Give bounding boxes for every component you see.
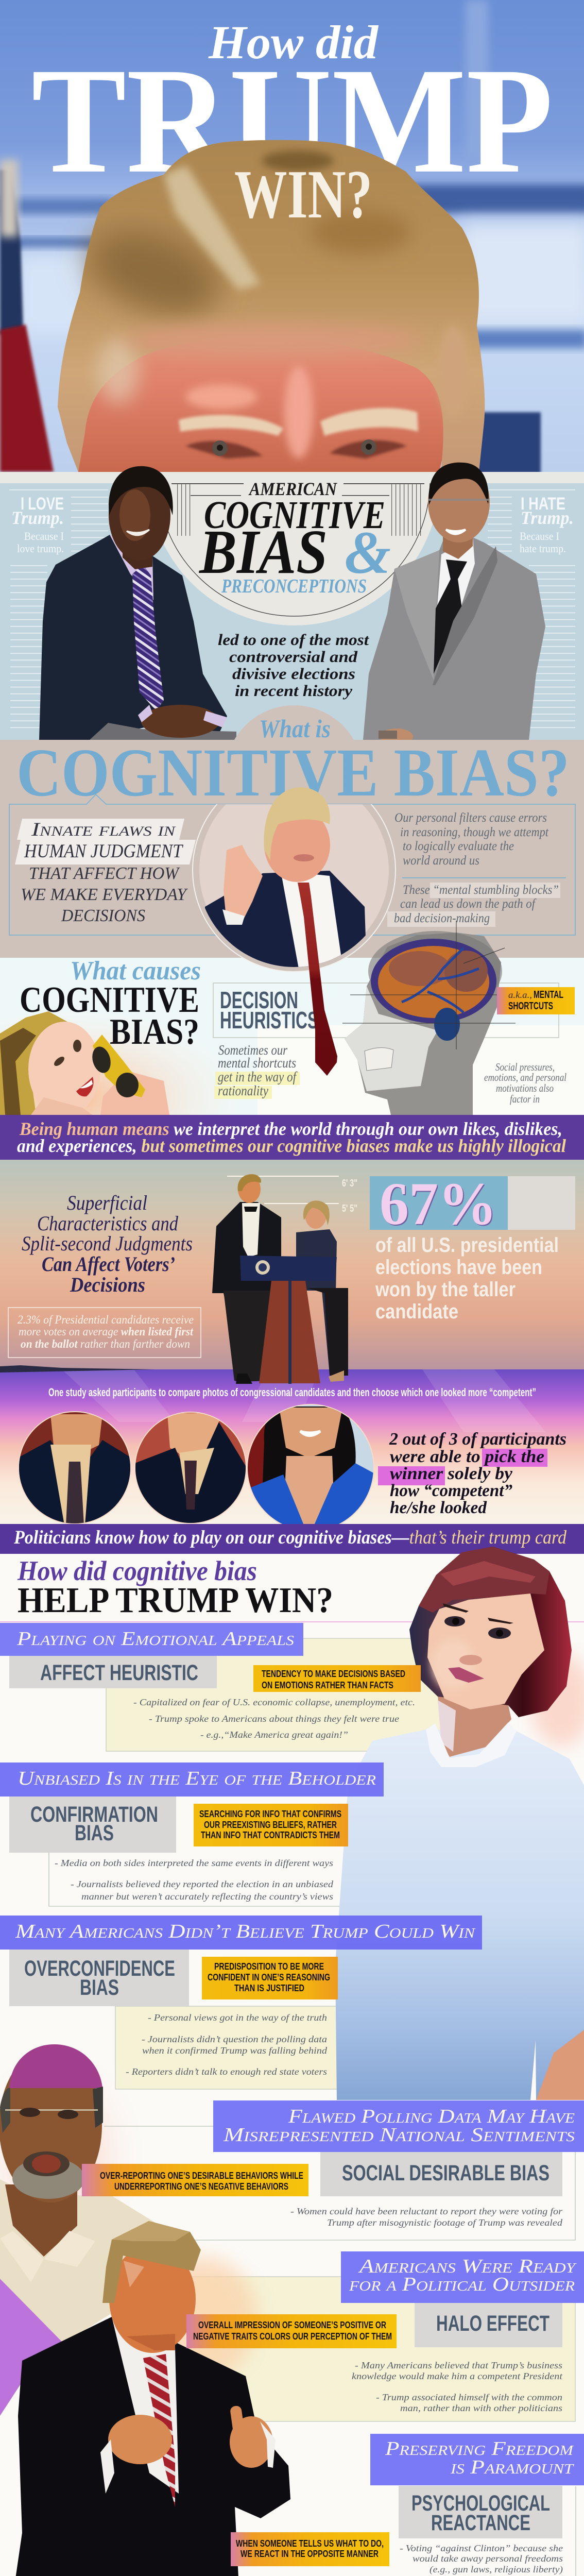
illustration: anatomical head with brain	[342, 921, 516, 1115]
definition: psychological reactance: WHEN SOMEONE TELLS US WHAT TO DO,	[236, 2538, 384, 2549]
label: a.k.a. mental shortcuts: SHORTCUTS	[508, 1001, 553, 1012]
heading: COGNITIVE: COGNITIVE	[20, 980, 199, 1020]
label: social desirable bias	[320, 2152, 562, 2196]
callout: ballot order: 2.3% of Presidential candidates receive	[18, 1313, 194, 1326]
label: halo effect	[415, 2303, 562, 2347]
bullets: affect heuristic: - Capitalized on fear of U.S. economic collapse, unemployment, etc.	[133, 1697, 415, 1707]
illustration: long red tie	[298, 883, 337, 1076]
hero panel	[0, 0, 584, 474]
bar: playing on emotional appeals	[0, 1623, 303, 1656]
heading: What is: What is	[259, 714, 331, 743]
heading: decision heuristics	[220, 987, 318, 1033]
callout: ballot order: more votes on average when listed first	[19, 1325, 194, 1338]
label: a.k.a. mental shortcuts	[497, 987, 575, 1014]
label: overconfidence bias: BIAS	[80, 1975, 119, 2000]
label: confirmation bias	[9, 1797, 176, 1853]
I hate Trump label: Because I	[520, 530, 559, 543]
panel: how did cognitive bias help Trump win	[0, 1524, 584, 2576]
definition: social desirable bias	[82, 2164, 308, 2196]
definition: halo effect	[186, 2314, 397, 2348]
text block: superficial characteristics: Can Affect Voters’	[42, 1252, 175, 1276]
bullets: psychological reactance	[337, 2543, 563, 2576]
hero photo background	[0, 0, 584, 474]
definition: social desirable bias: OVER-REPORTING ONE’S DESIRABLE BEHAVIORS WHILE	[100, 2170, 303, 2181]
text block: taller candidate: elections have been	[375, 1256, 542, 1279]
text block: superficial characteristics	[22, 1191, 193, 1296]
bullets: affect heuristic: - e.g.,“Make America great again!”	[200, 1730, 348, 1740]
text block: innate flaws	[15, 819, 196, 925]
bullets: psychological reactance: (e.g., gun laws, religious liberty)	[430, 2564, 563, 2575]
text block: superficial characteristics: Decisions	[70, 1273, 145, 1296]
bar: unbiased is in the eye of the beholder: Unbiased Is in the Eye of the Beholder	[18, 1768, 376, 1789]
portrait: candidate one	[15, 1409, 134, 1525]
I love Trump label	[11, 494, 64, 555]
text block: taller candidate	[375, 1234, 559, 1323]
bullets: halo effect	[352, 2360, 563, 2413]
text block: innate flaws: THAT AFFECT HOW	[29, 864, 180, 883]
bullets: overconfidence bias: when it confirmed Trump was falling behind	[142, 2045, 328, 2056]
bullets: halo effect: - Many Americans believed that Trump’s business	[355, 2360, 562, 2370]
definition: overconfidence bias	[202, 1957, 338, 1999]
panel: superficial characteristics	[0, 1160, 584, 1532]
cream box: halo effect	[190, 2277, 575, 2421]
bullets: overconfidence bias: - Journalists didn’t question the polling data	[142, 2034, 327, 2044]
text block: social pressures: factor in	[510, 1093, 540, 1105]
text block: pick the winner: he/she looked	[390, 1498, 487, 1517]
bar: flawed polling data: Flawed Polling Data May Have	[288, 2106, 575, 2127]
bullets: affect heuristic: - Trump spoke to Americans about things they felt were true	[149, 1714, 399, 1724]
definition: halo effect: NEGATIVE TRAITS COLORS OUR PERCEPTION OF THEM	[193, 2331, 392, 2342]
definition: overconfidence bias: CONFIDENT IN ONE’S REASONING	[208, 1972, 330, 1982]
text block: personal filters	[387, 811, 566, 927]
heading: What causes: What causes	[70, 956, 201, 986]
bar: Americans were ready: for a Political Outsider	[349, 2274, 575, 2295]
intro statement: controversial and	[229, 648, 358, 666]
emblem title	[198, 479, 391, 597]
bullets: overconfidence bias: - Personal views got in the way of the truth	[148, 2012, 327, 2023]
bullets: confirmation bias: manner but weren’t accurately reflecting the country’s views	[81, 1891, 333, 1902]
callout: ballot order: on the ballot rather than farther down	[21, 1337, 190, 1350]
bullets: psychological reactance: would take away personal freedoms	[413, 2553, 563, 2564]
text block: personal filters: These “mental stumbling blocks”	[403, 883, 559, 897]
decorative purple triangle	[0, 2279, 62, 2416]
text block: social pressures: Social pressures,	[495, 1061, 555, 1073]
definition: social desirable bias: UNDERREPORTING ONE’S NEGATIVE BEHAVIORS	[114, 2181, 288, 2192]
definition: overconfidence bias: PREDISPOSITION TO BE MORE	[214, 1961, 324, 1972]
text block: taller candidate: candidate	[375, 1300, 458, 1323]
text block: personal filters: to logically evaluate the	[403, 839, 514, 853]
I love Trump label: I LOVE	[21, 494, 64, 514]
definition: affect heuristic: ON EMOTIONS RATHER THAN FACTS	[262, 1680, 393, 1690]
torn edge	[0, 1365, 154, 1372]
definition: psychological reactance: WE REACT IN THE OPPOSITE MANNER	[241, 2548, 379, 2559]
panel: what causes cognitive bias	[0, 921, 584, 1115]
I love Trump label: love trump.	[17, 542, 64, 555]
intro statement: in recent history	[235, 682, 352, 700]
text block: social pressures	[484, 1061, 566, 1105]
decorative stripes right	[488, 489, 575, 733]
text block: innate flaws: WE MAKE EVERYDAY	[21, 885, 188, 904]
photo: Trump and Clinton at podium	[212, 1174, 348, 1384]
portrait: candidate three	[247, 1404, 374, 1532]
text block: personal filters: can lead us down the path of	[400, 897, 537, 911]
purple band: politicians: Politicians know how to play on our cognitive biases—that’s their trump card	[13, 1527, 566, 1548]
I hate Trump label: Trump.	[521, 507, 574, 528]
bullets: social desirable bias: - Women could have been reluctant to report they were voting for	[290, 2206, 563, 2216]
bar: Americans were ready: Americans Were Ready	[357, 2256, 577, 2277]
panel: American cognitive bias intro	[0, 462, 584, 740]
bullets: confirmation bias: - Media on both sides interpreted the same events in different ways	[55, 1858, 333, 1868]
definition: affect heuristic: TENDENCY TO MAKE DECISIONS BASED	[262, 1668, 405, 1679]
decorative stripes left	[9, 489, 108, 733]
heading: BIAS?: BIAS?	[110, 1012, 199, 1052]
text block: superficial characteristics: Split-second Judgments	[22, 1232, 193, 1255]
purple band: being human: and experiences, but sometimes our cognitive biases make us highly illogical	[17, 1136, 566, 1156]
bar: flawed polling data	[213, 2100, 584, 2152]
emblem title: COGNITIVE	[204, 494, 385, 537]
purple band: politicians	[0, 1524, 584, 1554]
text block: mental shortcuts	[214, 1042, 300, 1099]
photo: woman in blue shirt	[335, 1547, 584, 2100]
text block: superficial characteristics: Superficial	[67, 1191, 147, 1214]
heading: help Trump win: HELP TRUMP WIN?	[18, 1581, 333, 1620]
title: WIN?: WIN?	[234, 156, 372, 232]
I love Trump label: Because I	[24, 530, 64, 543]
outlined box	[9, 794, 575, 935]
purple band: being human: Being human means we interpret the world through our own likes, dislikes,	[19, 1118, 562, 1139]
definition: confirmation bias: SEARCHING FOR INFO THAT CONFIRMS	[199, 1808, 341, 1819]
label: psychological reactance	[399, 2486, 562, 2538]
text block: pick the winner: were able to pick the	[390, 1447, 544, 1466]
photo: Trump thumbs up	[8, 2221, 290, 2576]
text block: personal filters: bad decision-making	[394, 911, 490, 925]
text block: pick the winner: winner solely by	[390, 1464, 513, 1483]
heading: how did cognitive bias: How did cognitive bias	[17, 1555, 257, 1586]
I love Trump label: Trump.	[11, 507, 64, 528]
definition: confirmation bias: OUR PREEXISTING BELIEFS, RATHER	[204, 1819, 337, 1830]
outlined box: decision heuristics	[213, 983, 559, 1038]
intro statement: led to one of the most	[218, 631, 369, 649]
label: a.k.a. mental shortcuts: a.k.a.,	[508, 990, 532, 1000]
emblem title: &	[345, 519, 391, 586]
height marker: Trump: 6' 3"	[342, 1178, 357, 1189]
text block: innate flaws: DECISIONS	[61, 906, 145, 925]
text block: innate flaws: HUMAN JUDGMENT	[24, 841, 183, 862]
outline box: social desirable bias	[104, 2126, 575, 2240]
emblem circle	[164, 483, 433, 625]
text block: personal filters: in reasoning, though we attempt	[400, 825, 549, 839]
definition: affect heuristic	[253, 1665, 421, 1692]
text block: personal filters: Our personal filters cause errors	[394, 811, 547, 825]
I hate Trump label	[520, 494, 574, 555]
statistic: 67%: 67%	[381, 1171, 498, 1239]
label: overconfidence bias	[9, 1950, 189, 2006]
label: confirmation bias: BIAS	[75, 1821, 114, 1845]
text block: social pressures: emotions, and personal	[484, 1071, 566, 1083]
intro statement	[218, 631, 369, 700]
label: a.k.a. mental shortcuts: MENTAL	[534, 989, 563, 1001]
I hate Trump label: I HATE	[521, 494, 565, 514]
heading: decision heuristics: HEURISTICS	[220, 1007, 318, 1033]
text block: innate flaws: Innate flaws in	[31, 819, 176, 840]
heading: decision heuristics: DECISION	[220, 987, 298, 1013]
portrait: candidate two	[134, 1409, 247, 1525]
bar: preserving freedom	[370, 2434, 584, 2485]
bar: preserving freedom: Preserving Freedom	[385, 2438, 574, 2460]
text block: mental shortcuts: Sometimes our	[218, 1042, 287, 1058]
cream box: affect heuristic	[106, 1638, 441, 1751]
intro statement: divisive elections	[232, 665, 355, 683]
photo: Ben Carson	[0, 2035, 160, 2345]
bar: Americans were ready	[341, 2251, 584, 2303]
label: affect heuristic	[9, 1656, 217, 1688]
bullets: affect heuristic	[133, 1697, 415, 1740]
I hate Trump label: hate trump.	[520, 542, 566, 555]
emblem title: BIAS	[198, 517, 328, 587]
statistic: 67%: 67%	[380, 1170, 497, 1238]
bar: unbiased is in the eye of the beholder	[0, 1762, 384, 1797]
bullets: overconfidence bias	[126, 2012, 328, 2077]
title: How did: How did	[208, 16, 379, 69]
label: affect heuristic: AFFECT HEURISTIC	[40, 1660, 198, 1685]
bullets: psychological reactance: - Voting “against Clinton” because she	[400, 2543, 563, 2553]
text block: pick the winner: how “competent”	[390, 1481, 512, 1500]
text block: pick the winner	[378, 1430, 566, 1517]
statistic: 67%	[370, 1170, 575, 1239]
bar: many Americans: Many Americans Didn’t Believe Trump Could Win	[15, 1921, 476, 1942]
definition: psychological reactance	[231, 2532, 389, 2566]
title: TRUMP: TRUMP	[31, 36, 553, 205]
bullets: halo effect: - Trump associated himself with the common	[376, 2392, 562, 2402]
panel: what is cognitive bias	[0, 705, 584, 958]
bullets: halo effect: knowledge would make him a competent President	[352, 2371, 563, 2381]
bullets: social desirable bias	[290, 2206, 563, 2228]
hero photo: Trump head	[58, 140, 485, 472]
bullets: overconfidence bias: - Reporters didn’t talk to enough red state voters	[126, 2066, 327, 2077]
callout: ballot order	[8, 1308, 201, 1358]
text block: social pressures: motivations also	[496, 1082, 554, 1094]
label: overconfidence bias: OVERCONFIDENCE	[24, 1956, 175, 1981]
photo: man who hates Trump	[363, 462, 545, 745]
text block: taller candidate: won by the taller	[375, 1278, 516, 1301]
bar: preserving freedom: is Paramount	[450, 2456, 574, 2478]
outline box: confirmation bias	[49, 1853, 342, 1906]
text block: mental shortcuts: get in the way of	[218, 1069, 298, 1084]
definition: halo effect: OVERALL IMPRESSION OF SOMEONE’S POSITIVE OR	[198, 2319, 386, 2330]
emblem title: AMERICAN	[248, 479, 338, 499]
definition: confirmation bias	[194, 1804, 348, 1846]
bar: playing on emotional appeals: Playing on Emotional Appeals	[16, 1628, 295, 1650]
outline box: psychological reactance	[0, 2486, 576, 2576]
illustration: woman with sunglasses	[0, 1011, 169, 1116]
height marker: Clinton: 5' 5"	[342, 1203, 357, 1214]
purple band: being human	[0, 1115, 584, 1160]
bar: many Americans	[0, 1916, 482, 1950]
bullets: confirmation bias: - Journalists believed they reported the election in an unbiased	[71, 1879, 334, 1889]
bullets: confirmation bias	[55, 1858, 334, 1902]
text block: mental shortcuts: rationality	[218, 1083, 268, 1098]
label: confirmation bias: CONFIRMATION	[30, 1802, 158, 1827]
text block: pick the winner: 2 out of 3 of participants	[389, 1430, 566, 1449]
label: psychological reactance: REACTANCE	[431, 2511, 530, 2535]
definition: overconfidence bias: THAN IS JUSTIFIED	[234, 1982, 304, 1993]
purple gradient section	[0, 1369, 584, 1524]
definition: confirmation bias: THAN INFO THAT CONTRADICTS THEM	[201, 1829, 340, 1840]
photo: man who loves Trump	[39, 466, 236, 740]
bullets: halo effect: man, rather than with other politicians	[400, 2403, 562, 2413]
text block: personal filters: world around us	[403, 854, 479, 868]
emblem title: PRECONCEPTIONS	[221, 575, 367, 597]
bar: flawed polling data: Misrepresented National Sentiments	[223, 2124, 575, 2146]
cream box: overconfidence bias	[115, 2006, 340, 2089]
bullets: social desirable bias: Trump after misogynistic footage of Trump was revealed	[327, 2217, 563, 2228]
portrait: raised-hand Trump with red tie	[193, 769, 396, 972]
text block: superficial characteristics: Characteristics and	[37, 1212, 179, 1235]
text block: mental shortcuts: mental shortcuts	[218, 1055, 296, 1071]
